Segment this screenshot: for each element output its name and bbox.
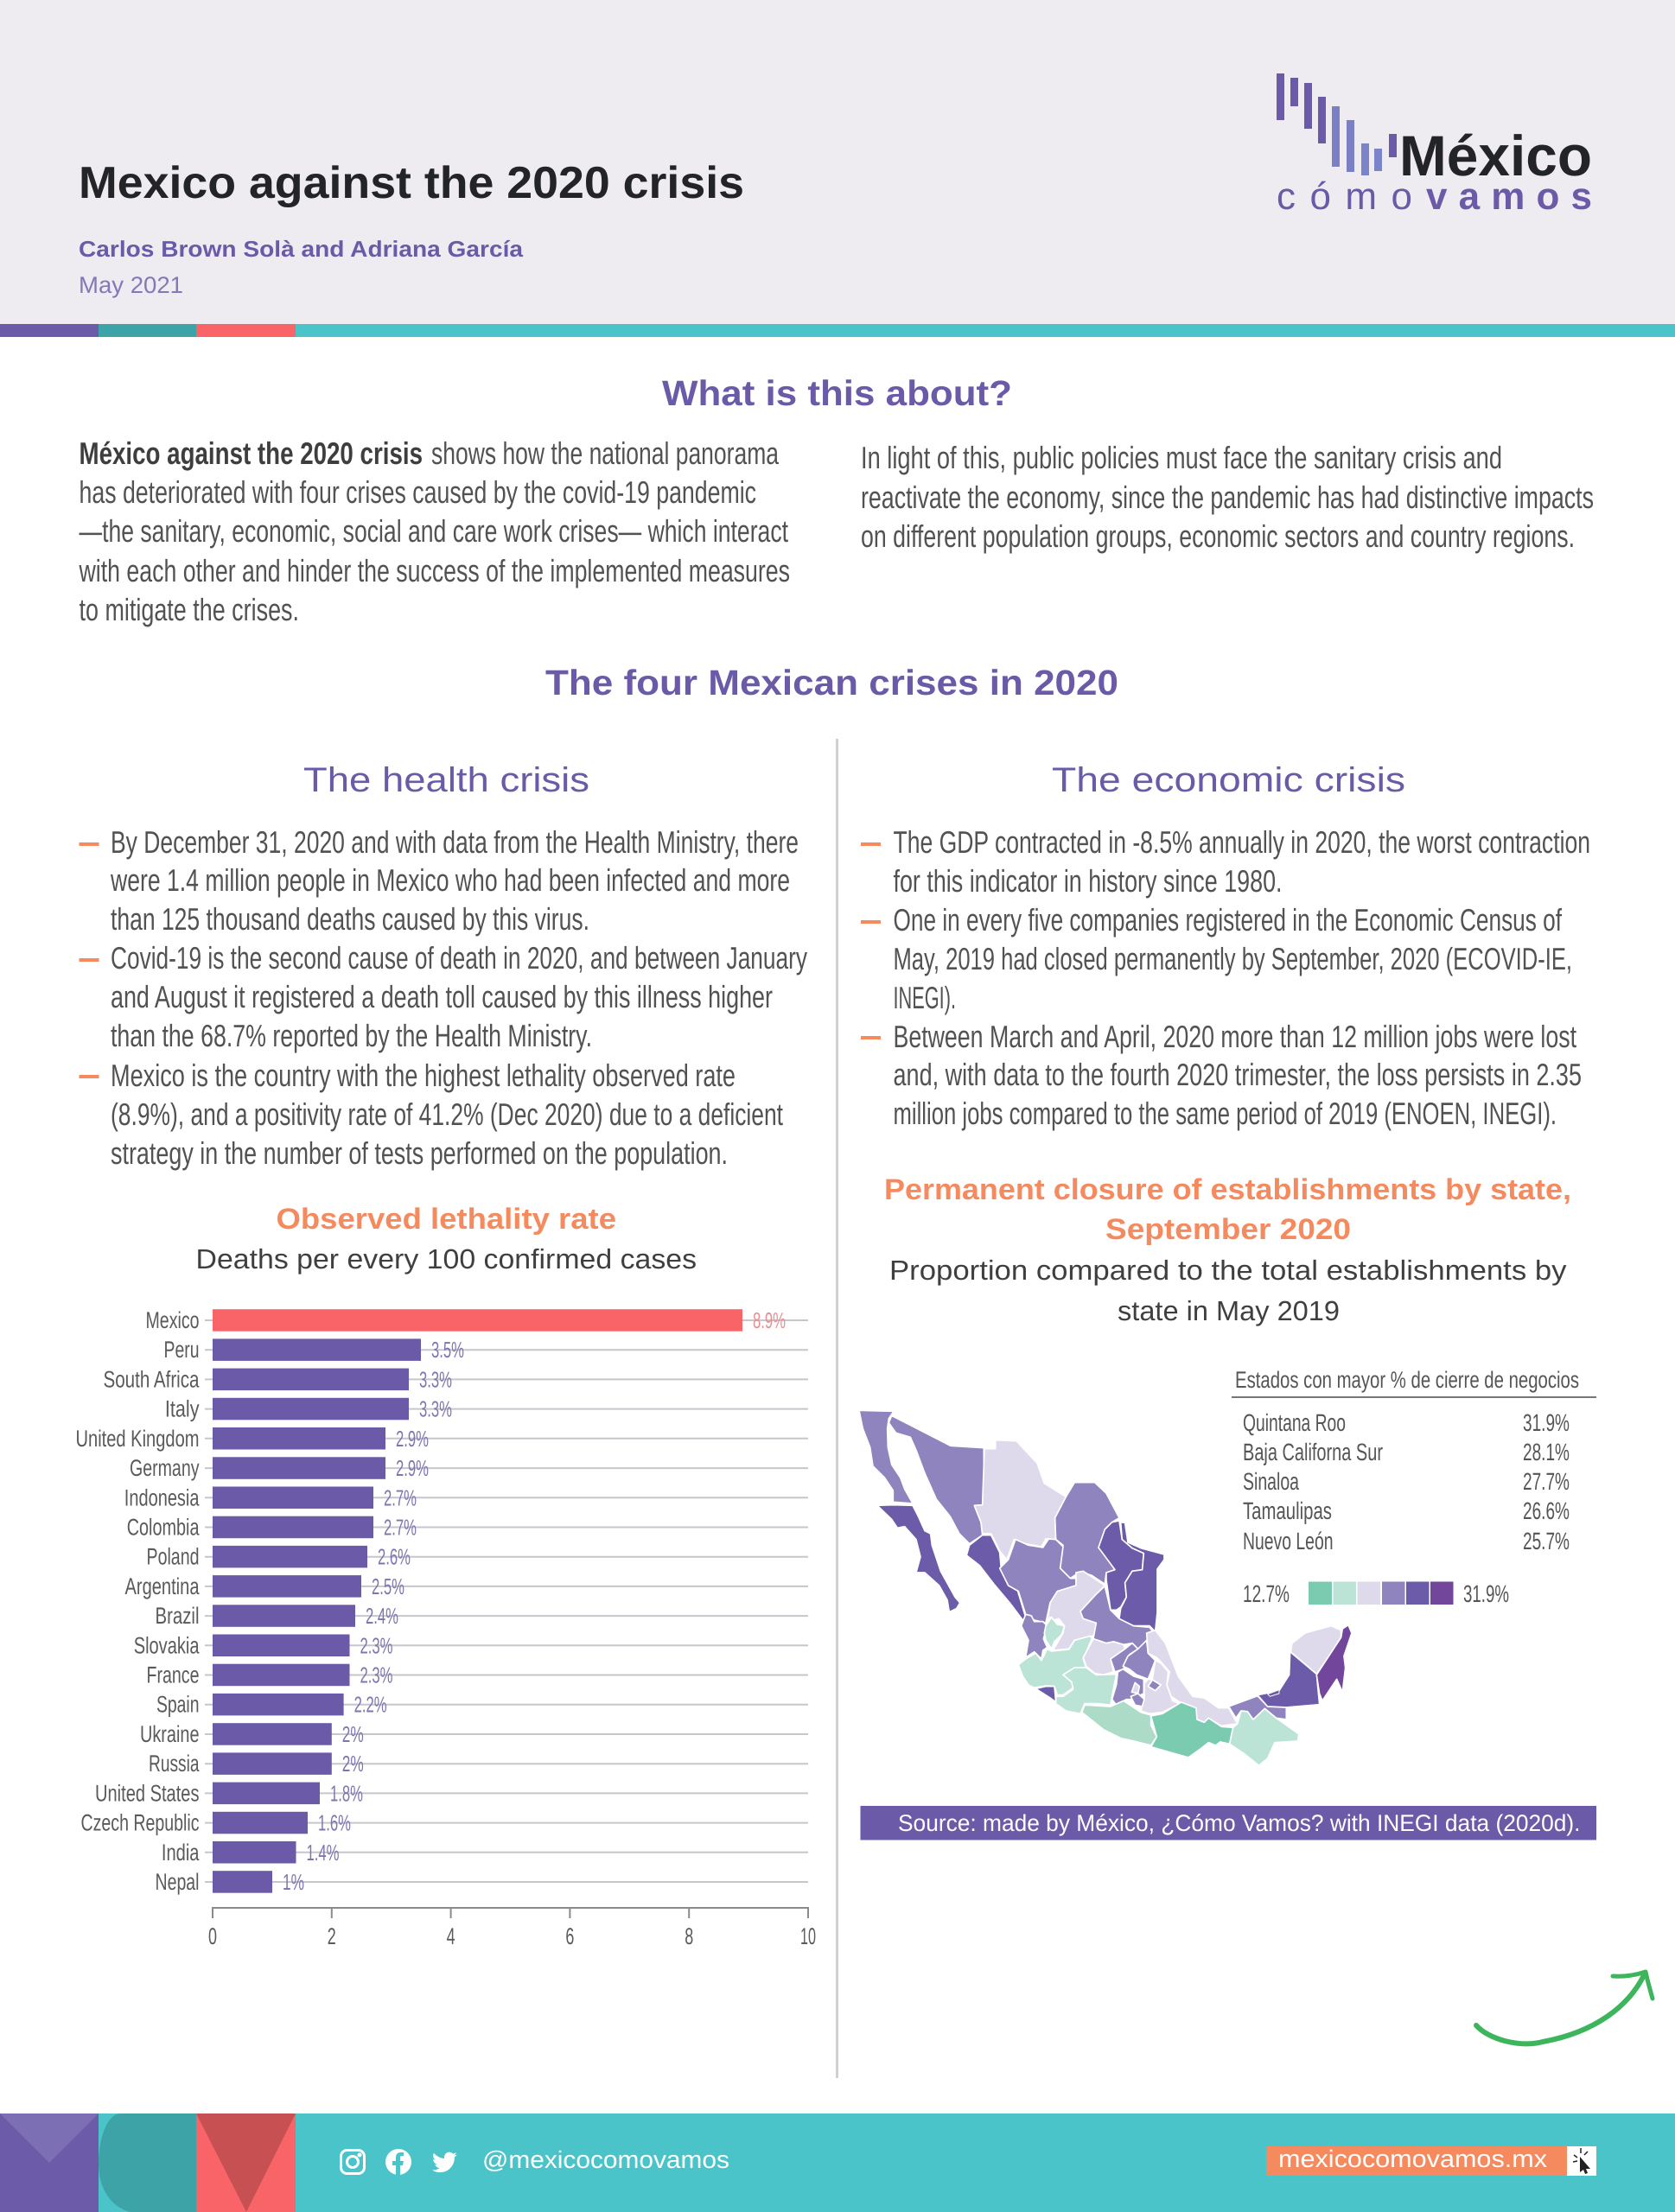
website button: mexicocomovamos.mx — [1278, 2145, 1547, 2172]
country labels: Indonesia — [124, 1484, 200, 1510]
x axis: 10 — [800, 1923, 816, 1949]
country labels: India — [162, 1840, 200, 1866]
text block: intro left: —the sanitary, economic, social and care work crises— which interact — [80, 513, 788, 549]
country labels: United Kingdom — [76, 1426, 199, 1452]
map legend — [1243, 1580, 1509, 1607]
table: states with highest closure: Quintana Roo — [1243, 1409, 1346, 1436]
bullet list: health crisis: strategy in the number of tests performed on the population. — [111, 1135, 728, 1171]
value labels: 2% — [342, 1751, 364, 1777]
text block: intro left — [79, 435, 790, 627]
bar chart: lethality by country — [76, 1307, 816, 1949]
value labels: 2.5% — [372, 1573, 404, 1599]
logo: México cómo vamos — [1277, 73, 1592, 218]
bullet list: health crisis: and August it registered a death toll caused by this illness higher — [111, 979, 773, 1014]
country labels: Slovakia — [134, 1632, 200, 1658]
text block: intro left: has deteriorated with four crises caused by the covid-19 pandemic — [80, 474, 756, 510]
map subtitle: Proportion compared to the total establishments by — [889, 1255, 1566, 1286]
table: states with highest closure: 26.6% — [1523, 1497, 1570, 1524]
country labels: Brazil — [156, 1603, 199, 1629]
map legend: 12.7% — [1243, 1580, 1290, 1607]
country labels: Nepal — [156, 1869, 199, 1895]
table: states with highest closure: Tamaulipas — [1243, 1497, 1332, 1524]
map subtitle: state in May 2019 — [1118, 1295, 1340, 1326]
bullet list: health crisis: By December 31, 2020 and with data from the Health Ministry, there — [111, 824, 799, 860]
value labels: 8.9% — [753, 1307, 786, 1333]
icon: twitter — [432, 2152, 457, 2172]
x axis: 8 — [685, 1923, 693, 1949]
country labels: Argentina — [124, 1573, 200, 1599]
panel: economic crisis — [859, 761, 1596, 1840]
value labels: 2.7% — [384, 1484, 417, 1510]
value labels: 1.6% — [318, 1810, 351, 1836]
country labels: South Africa — [104, 1366, 200, 1392]
footer decorative block: coral — [196, 2113, 296, 2212]
panel: footer — [0, 2113, 1675, 2212]
title: Mexico against the 2020 crisis — [79, 158, 744, 208]
value labels: 1% — [283, 1869, 304, 1895]
map title: September 2020 — [1105, 1213, 1351, 1246]
bullet list: economic crisis — [861, 824, 1590, 1131]
x axis — [208, 1908, 816, 1949]
value labels: 1.8% — [330, 1780, 363, 1806]
bullet list: health crisis: (8.9%), and a positivity rate of 41.2% (Dec 2020) due to a deficient — [111, 1096, 783, 1132]
icon: cursor — [1573, 2148, 1590, 2174]
country labels: France — [147, 1662, 199, 1688]
country labels: Spain — [156, 1692, 199, 1718]
logo: México cómo vamos: México — [1399, 124, 1592, 188]
value labels: 3.3% — [419, 1366, 452, 1392]
icon: facebook — [385, 2149, 411, 2175]
bullet list: health crisis: than the 68.7% reported by the Health Ministry. — [111, 1018, 592, 1053]
bullet list: health crisis: than 125 thousand deaths caused by this virus. — [111, 901, 589, 937]
table: states with highest closure: Sinaloa — [1243, 1468, 1299, 1495]
logo: México cómo vamos: cómo — [1277, 175, 1412, 218]
country labels: Colombia — [127, 1514, 200, 1540]
text block: intro left: shows how the national panorama — [431, 435, 780, 471]
bullet list: health crisis: Mexico is the country with the highest lethality observed rate — [111, 1058, 736, 1093]
table: states with highest closure — [1232, 1367, 1596, 1554]
source bar: Source: made by México, ¿Cómo Vamos? with INEGI data (2020d). — [898, 1810, 1580, 1836]
value labels: 2% — [342, 1721, 364, 1747]
value labels: 3.3% — [419, 1396, 452, 1422]
value labels: 2.3% — [360, 1662, 392, 1688]
bars — [213, 1309, 742, 1893]
text block: intro left: to mitigate the crises. — [80, 592, 299, 627]
country labels: Poland — [147, 1544, 199, 1570]
country labels — [76, 1307, 200, 1895]
heading: four crises: The four Mexican crises in 2020 — [545, 663, 1118, 702]
icon: instagram — [341, 2150, 365, 2174]
value labels: 2.6% — [378, 1544, 411, 1570]
heading: what is this about: What is this about? — [662, 373, 1012, 413]
map subtitle — [889, 1255, 1566, 1326]
value labels: 3.5% — [431, 1337, 464, 1363]
bullet list: health crisis: were 1.4 million people in Mexico who had been infected and more — [110, 862, 790, 898]
footer decorative block: purple — [0, 2113, 99, 2212]
date: May 2021 — [79, 272, 183, 298]
table: states with highest closure: Nuevo León — [1243, 1528, 1333, 1554]
value labels: 2.2% — [354, 1692, 387, 1718]
text block: intro left: México against the 2020 crisis — [80, 435, 423, 471]
text block: intro right — [861, 440, 1594, 554]
country labels: Ukraine — [140, 1721, 199, 1747]
social handle: @mexicocomovamos — [482, 2146, 729, 2173]
map title — [884, 1173, 1571, 1246]
country labels: United States — [95, 1780, 199, 1806]
bullet list: economic crisis: for this indicator in history since 1980. — [894, 863, 1283, 899]
x axis: 0 — [208, 1923, 217, 1949]
logo: México cómo vamos: vamos — [1426, 175, 1592, 218]
table: states with highest closure: 31.9% — [1523, 1409, 1570, 1436]
colour stripe — [0, 324, 1675, 337]
bullet list: health crisis: Covid-19 is the second cause of death in 2020, and between January — [111, 940, 807, 976]
chart subtitle: Deaths per every 100 confirmed cases — [195, 1243, 697, 1274]
value labels: 2.4% — [366, 1603, 398, 1629]
country labels: Germany — [130, 1455, 200, 1481]
map legend: 31.9% — [1463, 1580, 1509, 1607]
website button — [1266, 2145, 1596, 2176]
authors: Carlos Brown Solà and Adriana García — [79, 236, 524, 262]
bullet list: health crisis — [80, 824, 807, 1171]
value labels: 2.9% — [396, 1455, 429, 1481]
heading: economic crisis: The economic crisis — [1052, 761, 1405, 799]
x axis: 2 — [328, 1923, 336, 1949]
heading: health crisis: The health crisis — [303, 761, 589, 799]
country labels: Peru — [164, 1337, 199, 1363]
value labels: 2.9% — [396, 1426, 429, 1452]
value labels — [283, 1307, 786, 1895]
chart title: observed lethality rate: Observed lethality rate — [277, 1203, 616, 1236]
footer decorative block: teal — [99, 2113, 196, 2212]
country labels: Russia — [149, 1751, 200, 1777]
country labels: Italy — [165, 1396, 200, 1422]
table: states with highest closure: 27.7% — [1523, 1468, 1570, 1495]
value labels: 2.7% — [384, 1514, 417, 1540]
choropleth map of Mexico — [859, 1410, 1352, 1765]
bullet list: economic crisis: INEGI). — [894, 980, 956, 1015]
map title: Permanent closure of establishments by state, — [884, 1173, 1571, 1206]
country labels: Mexico — [145, 1307, 199, 1333]
panel: health crisis — [76, 761, 816, 1949]
value labels: 1.4% — [306, 1840, 339, 1866]
country labels: Czech Republic — [81, 1810, 199, 1836]
value labels: 2.3% — [360, 1632, 392, 1658]
table: states with highest closure: 25.7% — [1523, 1528, 1570, 1554]
arrow: green next-page — [1476, 1972, 1653, 2044]
x axis: 6 — [565, 1923, 574, 1949]
text block: intro left: with each other and hinder the success of the implemented measures — [79, 553, 790, 588]
table: states with highest closure: Baja Californa Sur — [1243, 1439, 1383, 1465]
x axis: 4 — [447, 1923, 455, 1949]
panel: header — [0, 0, 1675, 324]
table: states with highest closure: 28.1% — [1523, 1439, 1570, 1465]
